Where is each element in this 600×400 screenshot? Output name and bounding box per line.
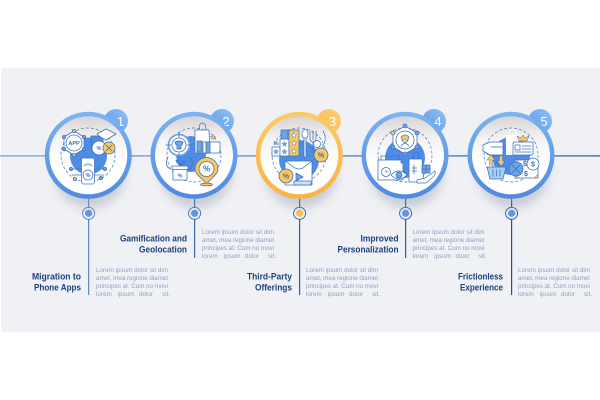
step 2 text: amet, mea regione diamet bbox=[202, 237, 274, 244]
step 5 bbox=[458, 109, 592, 298]
step 3 text: amet, mea regione diamet bbox=[306, 275, 378, 282]
step 2 bbox=[120, 109, 276, 260]
step 4 bbox=[338, 109, 487, 260]
step 3 text bbox=[306, 267, 380, 298]
step 1 heading: Migration to bbox=[32, 272, 81, 282]
step 3 badge: 3 bbox=[329, 114, 336, 129]
step 1 medallion bbox=[45, 112, 132, 208]
step 4 heading: Improved bbox=[360, 234, 398, 244]
icon: third-party offerings bbox=[272, 128, 328, 185]
icon: gamification and geolocation bbox=[166, 123, 221, 186]
step 1 badge: 1 bbox=[117, 114, 124, 129]
step 4 text: Lorem ipsum dolor sit dim bbox=[412, 229, 484, 236]
step 3 medallion bbox=[256, 112, 343, 208]
step 4 connector bbox=[405, 195, 406, 258]
step 1 text: ipsum bbox=[118, 291, 134, 298]
step 3 badge bbox=[317, 109, 341, 133]
icon: frictionless experience: $ bbox=[523, 161, 527, 168]
step 5 heading bbox=[458, 272, 503, 292]
step 1 text: sit. bbox=[162, 291, 170, 298]
step 2 text: Lorem ipsum dolor sit dim bbox=[202, 229, 274, 236]
step 1 text: principes at. Cum no movi bbox=[96, 283, 168, 290]
step 2 connector bbox=[194, 195, 195, 258]
step 5 text: Lorem ipsum dolor sit dim bbox=[518, 267, 590, 274]
step 5 medallion bbox=[468, 112, 554, 208]
step 3 text: principes at. Cum no movi bbox=[306, 283, 378, 290]
step 5 text: principes at. Cum no movi bbox=[518, 283, 590, 290]
background panel bbox=[1, 68, 600, 332]
step 3 text: sit. bbox=[372, 291, 380, 298]
icon: app migration bbox=[61, 128, 116, 184]
step 1 bbox=[32, 109, 170, 298]
step 3 bbox=[247, 109, 380, 298]
step 2 badge: 2 bbox=[222, 114, 230, 129]
step 5 connector bbox=[511, 195, 512, 295]
step 5 text: amet, mea regione diamet bbox=[518, 275, 590, 282]
step 2 text: ipsum bbox=[224, 253, 240, 260]
step 5 badge bbox=[528, 109, 552, 133]
step 2 text: lorem bbox=[202, 253, 218, 260]
step 4 medallion bbox=[362, 112, 448, 208]
step 4 text: principes at. Cum no movi bbox=[412, 245, 484, 252]
step 1 node bbox=[83, 207, 95, 219]
step 4 text bbox=[412, 229, 487, 260]
step 4 text: lorem bbox=[412, 253, 428, 260]
icon: improved personalization bbox=[378, 124, 435, 183]
step 3 text: lorem bbox=[306, 291, 322, 298]
step 1 text: dolor bbox=[139, 291, 153, 298]
icon: third-party offerings: % bbox=[318, 152, 325, 160]
step 3 heading bbox=[247, 272, 293, 292]
icon: app migration: APP bbox=[68, 141, 80, 147]
step 4 text: amet, mea regione diamet bbox=[412, 237, 485, 244]
step 4 text: sit. bbox=[478, 253, 487, 260]
step 4 text: dolor bbox=[456, 253, 470, 260]
step 2 text: sit. bbox=[268, 253, 276, 260]
icon: third-party offerings: % bbox=[283, 174, 290, 180]
step 2 badge bbox=[210, 109, 234, 133]
step 1 connector bbox=[88, 195, 89, 295]
step 4 node bbox=[400, 207, 412, 219]
step 5 text: ipsum bbox=[540, 291, 556, 298]
icon: frictionless experience: $ bbox=[524, 171, 528, 178]
step 3 text: dolor bbox=[349, 291, 363, 298]
step 5 text: lorem bbox=[518, 291, 534, 298]
step 5 badge: 5 bbox=[540, 114, 548, 129]
step 4 heading: Personalization bbox=[338, 244, 399, 254]
icon: app migration: % bbox=[86, 173, 91, 179]
step 2 medallion bbox=[150, 112, 238, 208]
step 2 node bbox=[189, 207, 201, 219]
step 5 text: dolor bbox=[561, 291, 575, 298]
step 3 connector bbox=[299, 195, 300, 295]
step 2 text bbox=[202, 229, 276, 260]
icon: frictionless experience: $ bbox=[531, 162, 535, 168]
step 3 node bbox=[294, 207, 306, 219]
step 4 badge: 4 bbox=[434, 114, 442, 129]
step 2 text: dolor bbox=[245, 253, 259, 260]
step 2 heading: Gamification and bbox=[120, 234, 187, 244]
step 5 heading: Frictionless bbox=[458, 272, 503, 282]
step 5 text: sit. bbox=[584, 291, 592, 298]
icon: app migration: % bbox=[97, 146, 102, 152]
icon: gamification and geolocation: % bbox=[203, 164, 210, 174]
step 3 text: ipsum bbox=[328, 291, 344, 298]
step 1 badge bbox=[104, 109, 128, 133]
step 2 heading: Geolocation bbox=[139, 244, 187, 254]
step 1 heading bbox=[32, 272, 81, 292]
step 1 text: amet, mea regione diamet bbox=[96, 275, 168, 282]
step 4 text: ipsum bbox=[434, 253, 451, 260]
step 4 heading bbox=[338, 234, 399, 254]
step 1 heading: Phone Apps bbox=[34, 282, 81, 292]
icon: gamification and geolocation: % bbox=[178, 174, 183, 180]
step 3 text: Lorem ipsum dolor sit dim bbox=[306, 267, 378, 274]
step 2 heading bbox=[120, 234, 187, 254]
step 1 text: Lorem ipsum dolor sit dim bbox=[96, 267, 168, 274]
step 5 heading: Experience bbox=[460, 282, 503, 292]
step 3 heading: Offerings bbox=[255, 282, 292, 292]
timeline axis bbox=[0, 155, 600, 156]
step 1 text bbox=[96, 267, 170, 298]
step 1 text: lorem bbox=[96, 291, 112, 298]
step 4 badge bbox=[422, 109, 446, 133]
step 3 heading: Third-Party bbox=[247, 272, 293, 282]
icon: frictionless experience bbox=[483, 128, 539, 182]
step 5 node bbox=[506, 207, 518, 219]
step 2 text: principes at. Cum no movi bbox=[202, 245, 274, 252]
step 5 text bbox=[518, 267, 592, 298]
icon: third-party offerings: % bbox=[274, 141, 279, 147]
